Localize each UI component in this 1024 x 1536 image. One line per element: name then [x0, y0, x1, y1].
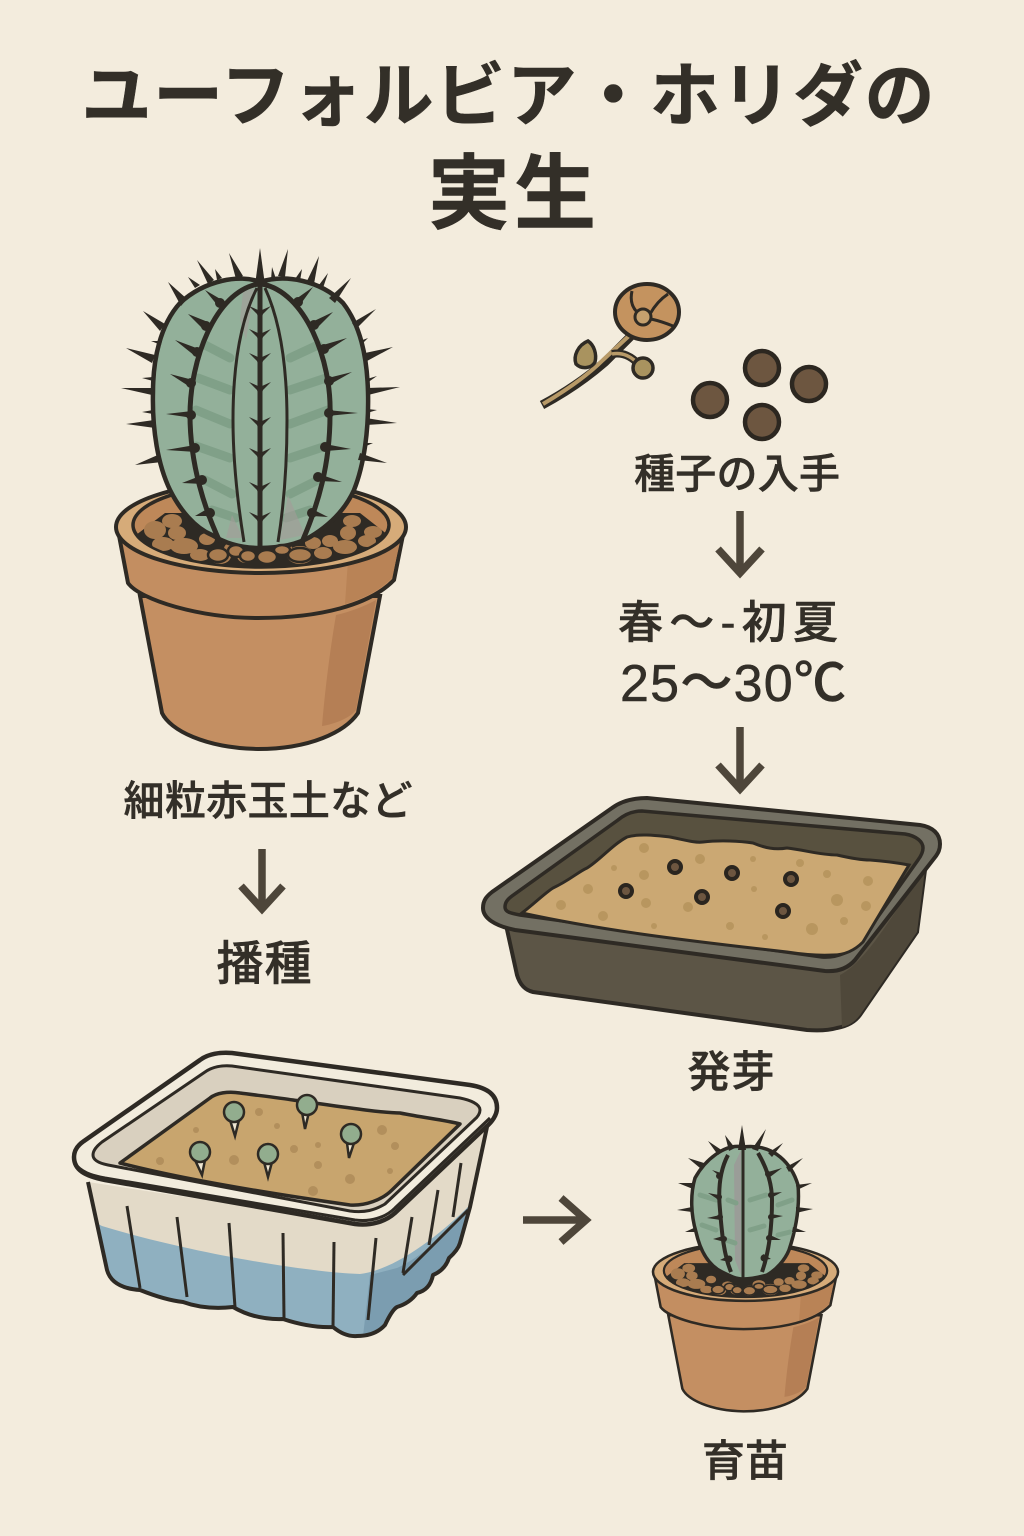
title: ユーフォルビア・ホリダの — [82, 57, 934, 135]
seedling — [341, 1124, 361, 1158]
illustration: dark tray with seeds — [483, 798, 940, 1030]
illustration: potted Euphorbia horrida — [116, 248, 406, 749]
title: 実生 — [428, 149, 596, 240]
illustration: seed pod — [542, 284, 679, 405]
label: season and temperature — [618, 597, 846, 713]
seedling — [190, 1142, 210, 1175]
illustration: white tray with seedlings in water — [74, 1053, 497, 1345]
title — [82, 57, 934, 240]
label: raising seedlings: 育苗 — [702, 1438, 788, 1486]
seedling — [297, 1095, 317, 1129]
seedling — [224, 1102, 244, 1136]
illustration: young potted plant — [653, 1125, 838, 1411]
arrow: seeds to season — [718, 511, 762, 573]
seedling — [258, 1144, 278, 1177]
label: fine akadama soil: 細粒赤玉土など — [124, 778, 412, 824]
arrow: tray to young plant — [523, 1198, 586, 1242]
arrow: soil to sowing — [241, 849, 283, 909]
label: season and temperature: 春～-初夏 — [618, 597, 838, 648]
illustration: four seeds — [693, 351, 826, 439]
cactus body — [121, 248, 400, 548]
label: germination: 発芽 — [688, 1049, 774, 1097]
young cactus body — [677, 1125, 813, 1279]
arrow: season to tray — [718, 727, 762, 789]
label: obtaining seeds: 種子の入手 — [634, 451, 840, 497]
label: sowing: 播種 — [216, 937, 312, 990]
label: season and temperature: 25～30℃ — [620, 655, 846, 713]
